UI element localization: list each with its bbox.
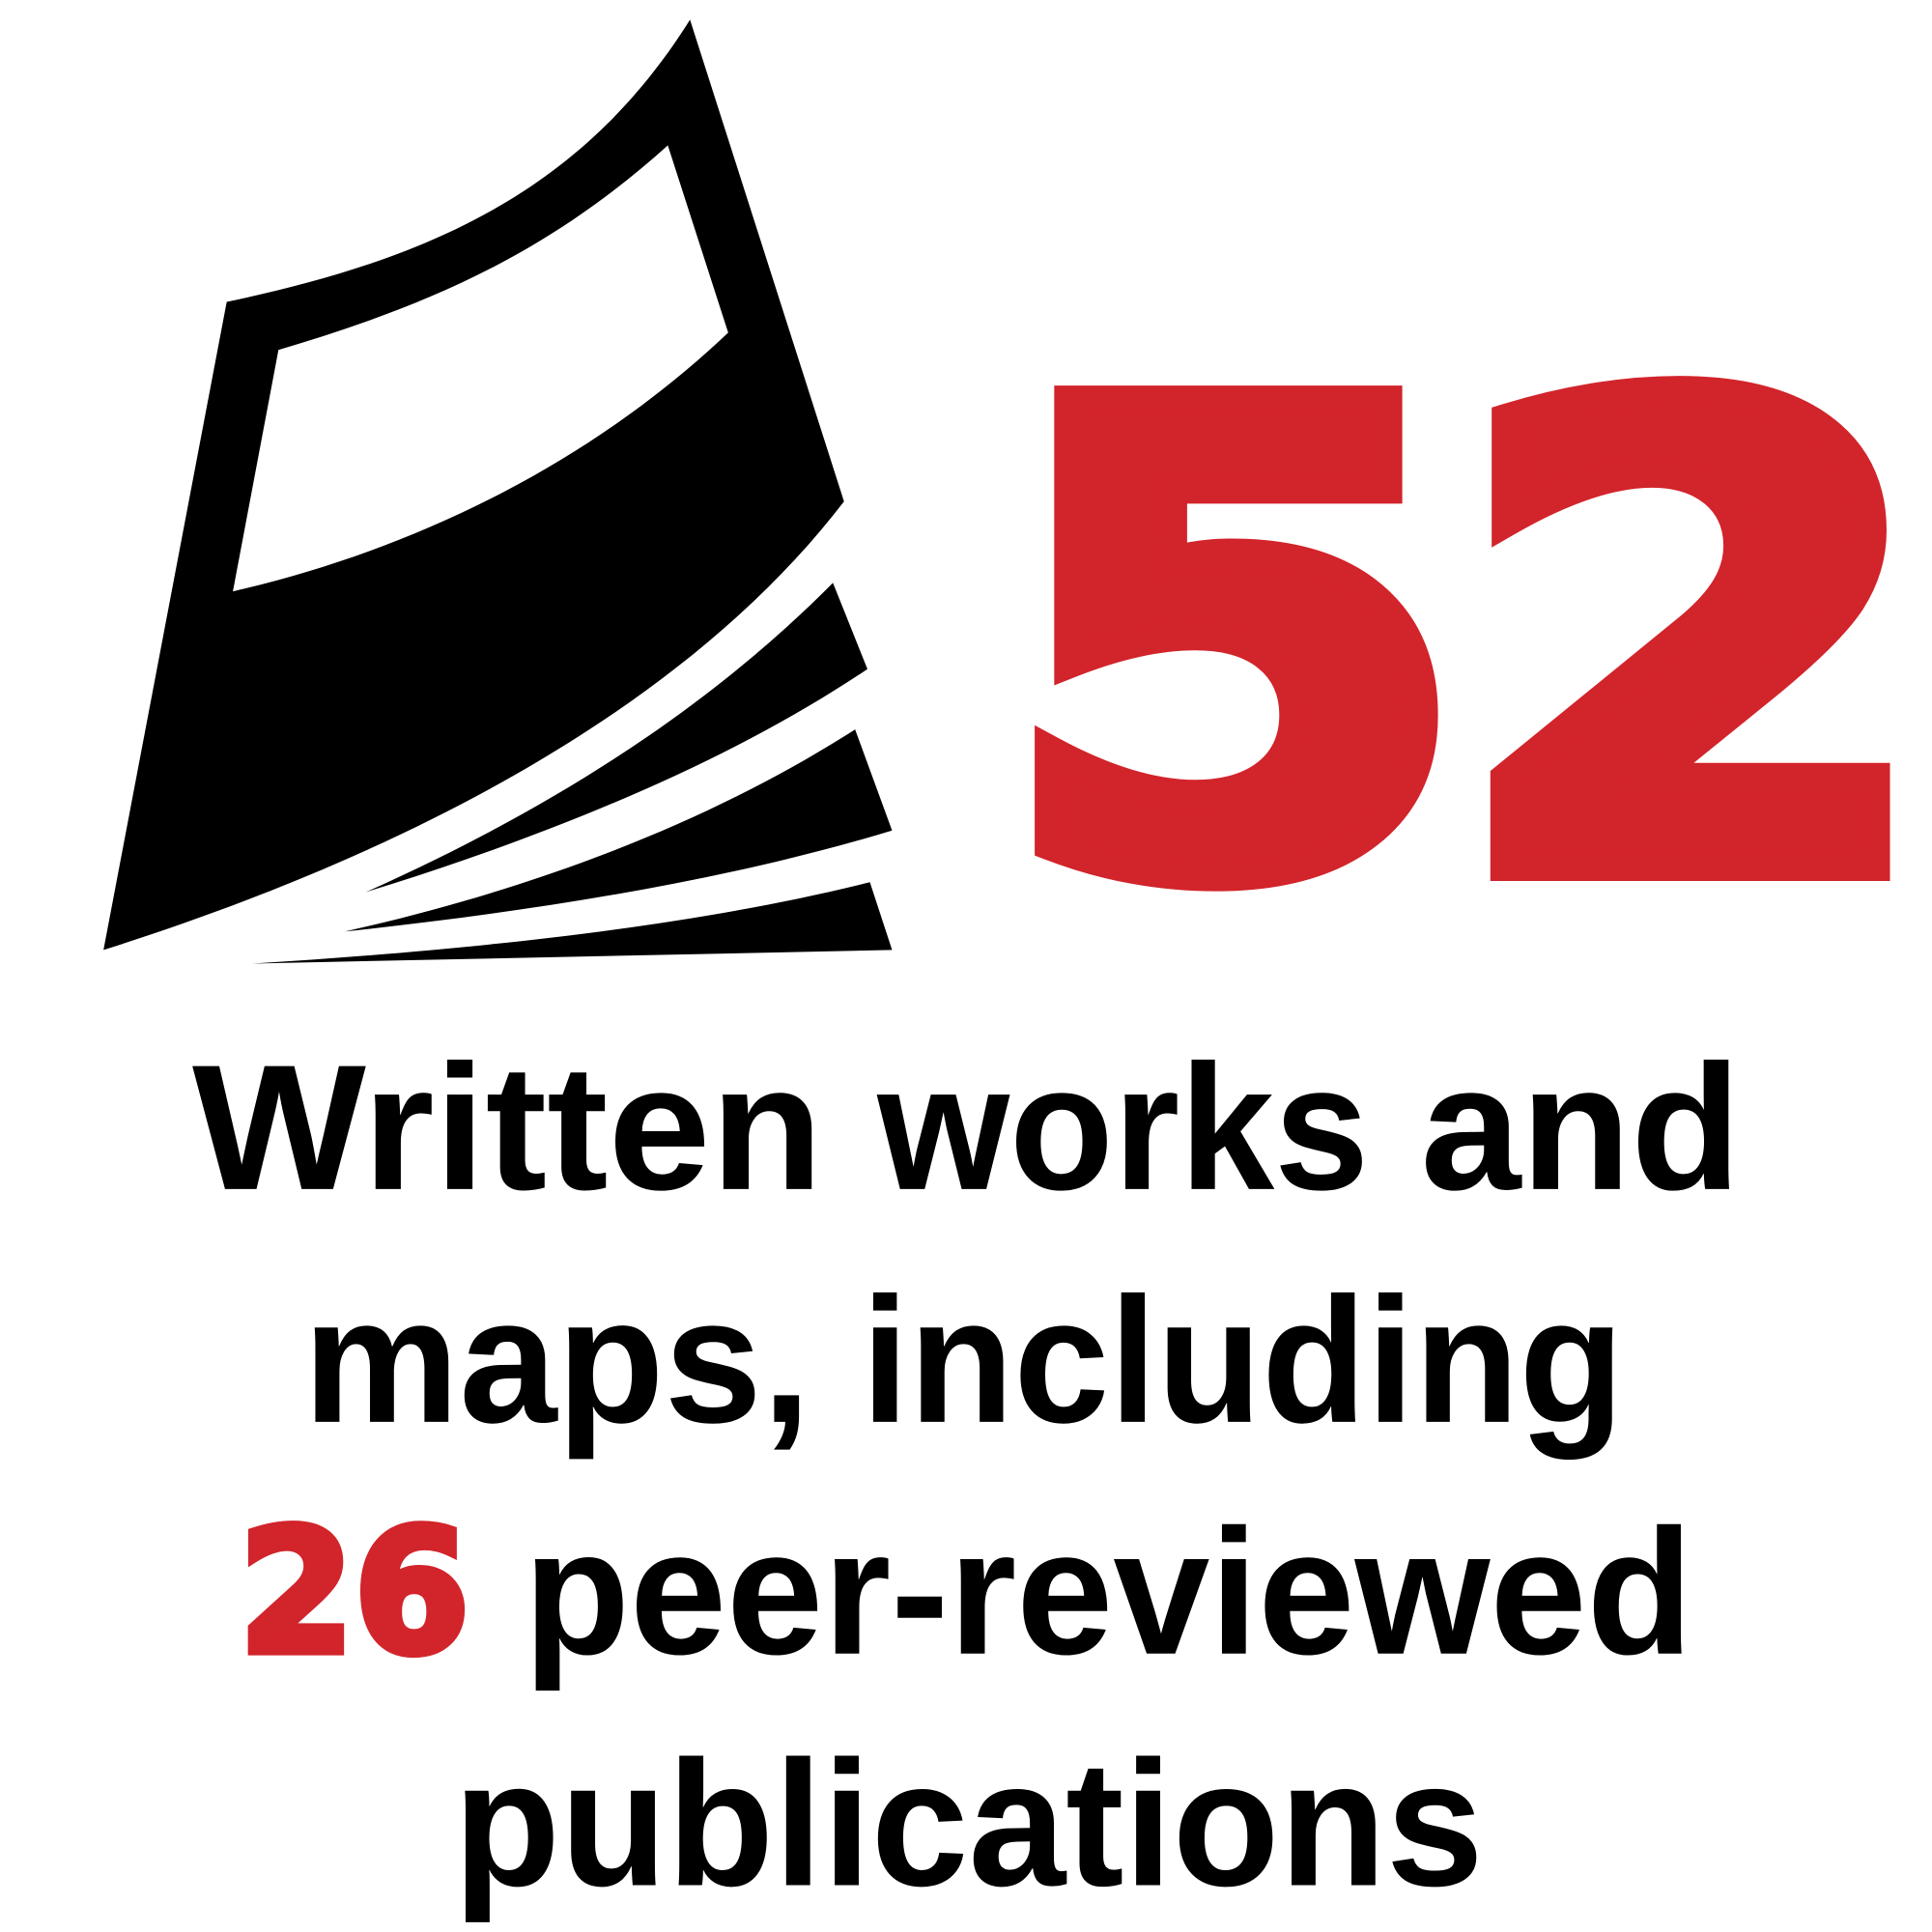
text line: Written works and: and — [1421, 1029, 1741, 1228]
book cover with window — [103, 19, 844, 950]
page 2 — [345, 729, 892, 931]
text line: maps, including — [303, 1262, 1624, 1461]
text line: publications: publications — [453, 1725, 1484, 1924]
text line: maps, including: maps, — [303, 1262, 810, 1461]
page 3 — [252, 882, 892, 963]
big number 52 — [998, 272, 1932, 1019]
icon: open book with fanned pages — [103, 19, 892, 963]
digit 2: 2 — [1452, 272, 1932, 1018]
text line: Written works and: Written — [192, 1029, 823, 1228]
text line: Written works and: works — [876, 1029, 1369, 1228]
highlighted number 26: 26 — [239, 1493, 469, 1691]
page 1 — [366, 582, 867, 892]
text line: maps, including: including — [862, 1262, 1624, 1461]
text line: peer-reviewed: peer-reviewed — [524, 1493, 1693, 1692]
digit 5: 5 — [998, 273, 1469, 1019]
text line: Written works and — [192, 1029, 1741, 1228]
